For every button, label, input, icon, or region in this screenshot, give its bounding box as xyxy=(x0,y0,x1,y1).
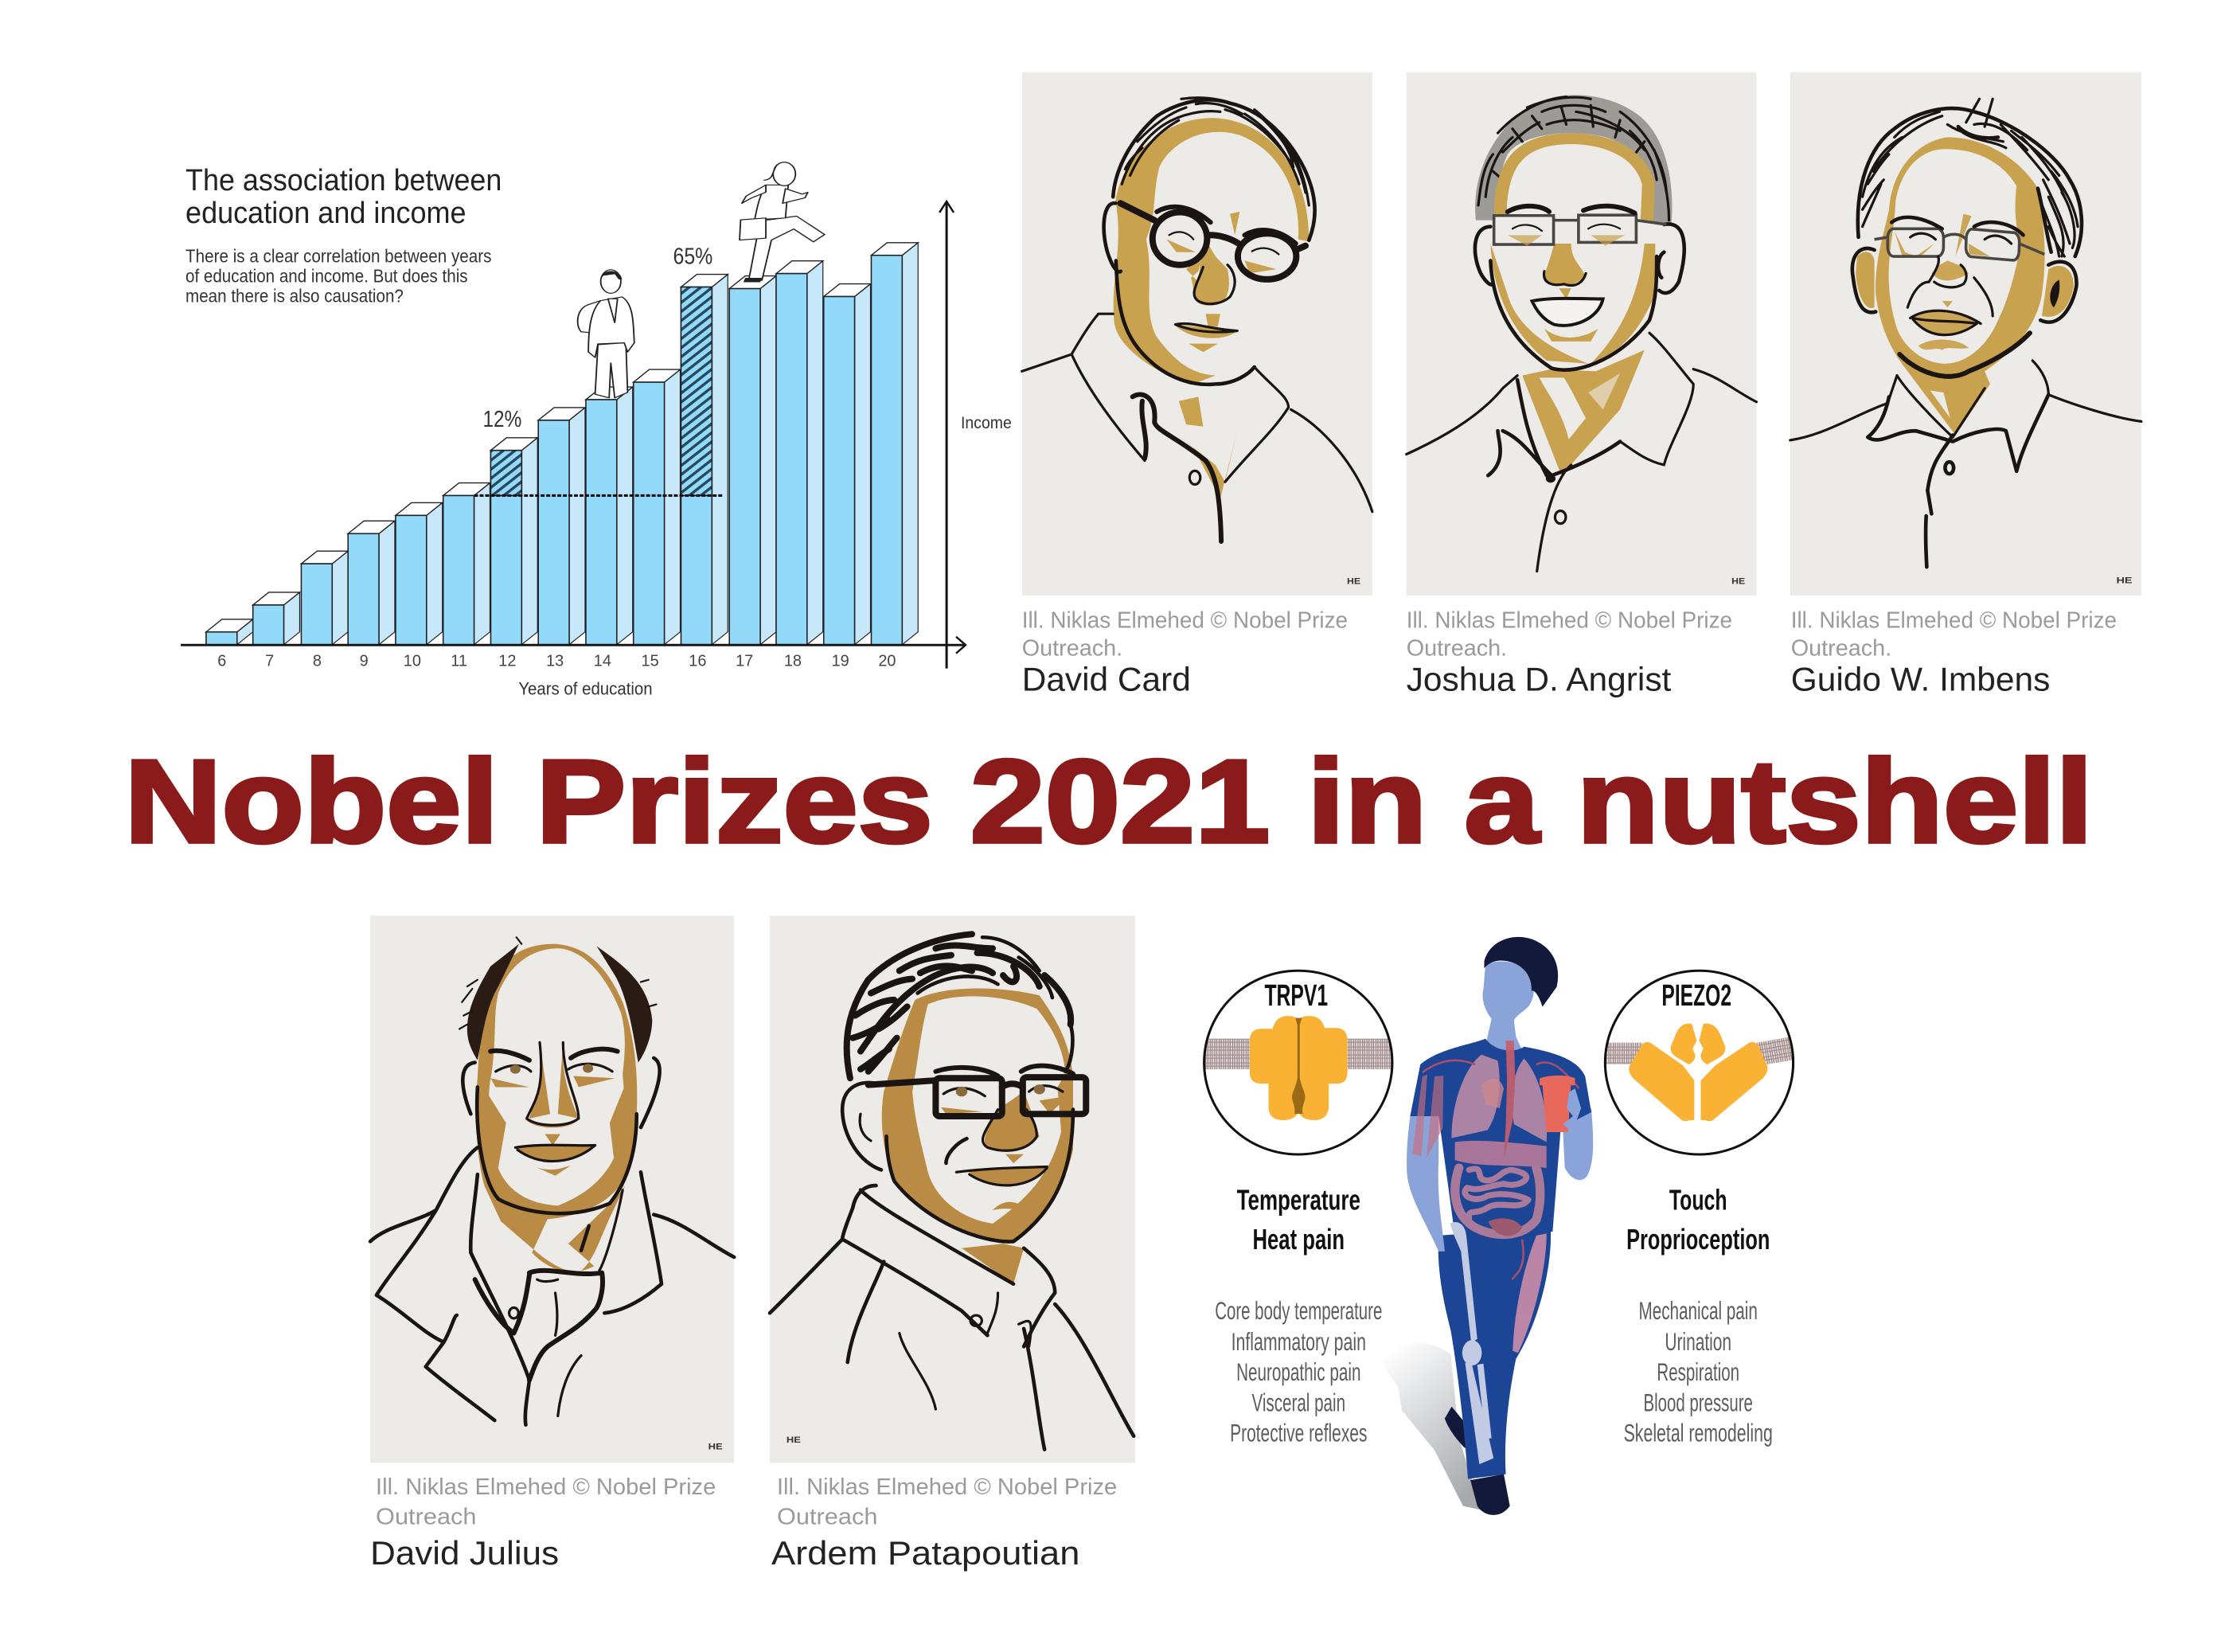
list: PIEZO2 functions: Skeletal remodeling xyxy=(1624,1419,1773,1447)
x axis tick labels: 17 xyxy=(736,653,753,670)
portrait: Joshua D. Angrist: HE xyxy=(1731,577,1746,586)
portrait: Ardem Patapoutian xyxy=(770,916,1135,1463)
far arm xyxy=(1563,1108,1593,1180)
icon: walking man with organs xyxy=(1377,937,1593,1515)
x axis tick labels: 16 xyxy=(689,653,706,670)
x axis tick labels: 13 xyxy=(546,653,564,670)
list: PIEZO2 functions xyxy=(1624,1296,1773,1447)
chart title xyxy=(185,164,502,230)
caption: David Julius xyxy=(370,1474,716,1572)
coffee cup xyxy=(1540,1076,1581,1132)
list: TRPV1 functions: Visceral pain xyxy=(1252,1388,1345,1417)
heading: Temperature / Heat pain: Temperature xyxy=(1237,1184,1360,1216)
x axis tick labels: 20 xyxy=(878,653,896,670)
caption: Ardem Patapoutian: Outreach xyxy=(777,1505,877,1530)
list: TRPV1 functions xyxy=(1215,1296,1382,1447)
label 65%: 65% xyxy=(673,244,712,270)
heading: Temperature / Heat pain: Heat pain xyxy=(1253,1224,1345,1256)
x axis tick labels: 15 xyxy=(642,653,659,670)
caption: Guido W. Imbens: Ill. Niklas Elmehed © Nobel Prize xyxy=(1791,607,2117,633)
caption: Ardem Patapoutian: Ardem Patapoutian xyxy=(771,1534,1079,1572)
portrait: Ardem Patapoutian: HE xyxy=(787,1435,801,1445)
x axis tick labels: 14 xyxy=(594,653,611,670)
caption: Guido W. Imbens: Outreach. xyxy=(1791,636,1891,662)
x axis tick labels: 7 xyxy=(265,653,274,670)
label 12%: 12% xyxy=(483,407,521,432)
caption: David Card: Ill. Niklas Elmehed © Nobel Prize xyxy=(1022,607,1348,633)
chart description: mean there is also causation? xyxy=(185,285,404,306)
list: TRPV1 functions: Inflammatory pain xyxy=(1232,1327,1366,1356)
caption: Joshua D. Angrist: Joshua D. Angrist xyxy=(1407,660,1672,697)
x axis tick labels: 11 xyxy=(451,653,467,670)
caption: Ardem Patapoutian: Ill. Niklas Elmehed © Nobel Prize xyxy=(777,1474,1117,1500)
caption: Joshua D. Angrist: Ill. Niklas Elmehed © Nobel Prize xyxy=(1407,607,1732,633)
sensor label: PIEZO2: PIEZO2 xyxy=(1661,979,1731,1013)
organs xyxy=(1412,1041,1579,1353)
x axis tick labels xyxy=(217,653,896,670)
hatched increase at 16 years xyxy=(681,287,712,495)
bones xyxy=(1450,1222,1493,1464)
chart description: of education and income. But does this xyxy=(185,266,468,287)
x axis tick labels: 18 xyxy=(784,653,802,670)
panel: temperature and touch sensors xyxy=(1203,937,1798,1515)
list: TRPV1 functions: Core body temperature xyxy=(1215,1296,1382,1325)
portrait: Joshua D. Angrist xyxy=(1407,72,1756,596)
portrait: David Julius xyxy=(370,916,734,1463)
portrait: David Julius: HE xyxy=(708,1441,723,1451)
portrait: Guido W. Imbens xyxy=(1790,72,2141,596)
axes xyxy=(181,201,966,669)
chart title: The association between xyxy=(185,164,502,197)
caption: David Card xyxy=(1022,607,1348,697)
heading: Touch / Proprioception xyxy=(1626,1184,1770,1256)
sensor circle: TRPV1 xyxy=(1203,971,1395,1154)
caption: David Julius: Outreach xyxy=(376,1505,477,1530)
icon: walking woman with bag xyxy=(740,162,825,283)
portrait: Guido W. Imbens: HE xyxy=(2116,576,2133,585)
x axis tick labels: 8 xyxy=(313,653,322,670)
trousers xyxy=(1438,1228,1551,1479)
sensor circle: PIEZO2 xyxy=(1603,971,1798,1154)
x axis title: Years of education xyxy=(518,678,653,698)
portrait: David Card: HE xyxy=(1347,577,1360,586)
caption: Guido W. Imbens xyxy=(1791,607,2117,697)
caption: Joshua D. Angrist: Outreach. xyxy=(1407,636,1507,662)
x axis tick labels: 12 xyxy=(498,653,516,670)
caption: David Julius: Ill. Niklas Elmehed © Nobel Prize xyxy=(376,1474,716,1500)
bar chart: income by years of education xyxy=(206,243,918,645)
caption: Joshua D. Angrist xyxy=(1407,607,1732,697)
list: PIEZO2 functions: Respiration xyxy=(1657,1357,1739,1386)
caption: Ardem Patapoutian xyxy=(771,1474,1117,1572)
list: PIEZO2 functions: Urination xyxy=(1665,1327,1731,1356)
portrait: David Card xyxy=(1022,72,1372,596)
caption: Guido W. Imbens: Guido W. Imbens xyxy=(1791,660,2050,697)
list: TRPV1 functions: Protective reflexes xyxy=(1230,1419,1367,1447)
caption: David Card: Outreach. xyxy=(1022,636,1122,662)
chart description: There is a clear correlation between years xyxy=(185,246,491,267)
shirt xyxy=(1410,1039,1591,1240)
list: PIEZO2 functions: Blood pressure xyxy=(1643,1388,1753,1417)
sensor label: TRPV1: TRPV1 xyxy=(1264,979,1328,1013)
heading: Touch / Proprioception: Touch xyxy=(1669,1184,1727,1216)
caption: David Julius: David Julius xyxy=(370,1534,559,1572)
main title: Nobel Prizes 2021 in a nutshell xyxy=(124,736,2093,868)
icon: standing student with backpack xyxy=(578,270,634,398)
neck and head xyxy=(1483,961,1534,1055)
hatched increase at 12 years xyxy=(490,451,521,495)
chart description xyxy=(185,246,491,306)
panel: education and income chart xyxy=(181,162,1012,698)
x axis tick labels: 9 xyxy=(360,653,369,670)
x axis tick labels: 10 xyxy=(404,653,421,670)
x axis tick labels: 6 xyxy=(217,653,226,670)
dotted reference line xyxy=(474,494,723,497)
caption: David Card: David Card xyxy=(1022,660,1191,697)
y axis title: Income xyxy=(961,414,1012,432)
heading: Touch / Proprioception: Proprioception xyxy=(1626,1224,1770,1256)
list: TRPV1 functions: Neuropathic pain xyxy=(1236,1357,1360,1386)
chart title: education and income xyxy=(185,197,466,230)
heading: Temperature / Heat pain xyxy=(1237,1184,1360,1256)
floor shadow xyxy=(1377,1343,1481,1510)
x axis tick labels: 19 xyxy=(832,653,849,670)
list: PIEZO2 functions: Mechanical pain xyxy=(1639,1296,1758,1325)
